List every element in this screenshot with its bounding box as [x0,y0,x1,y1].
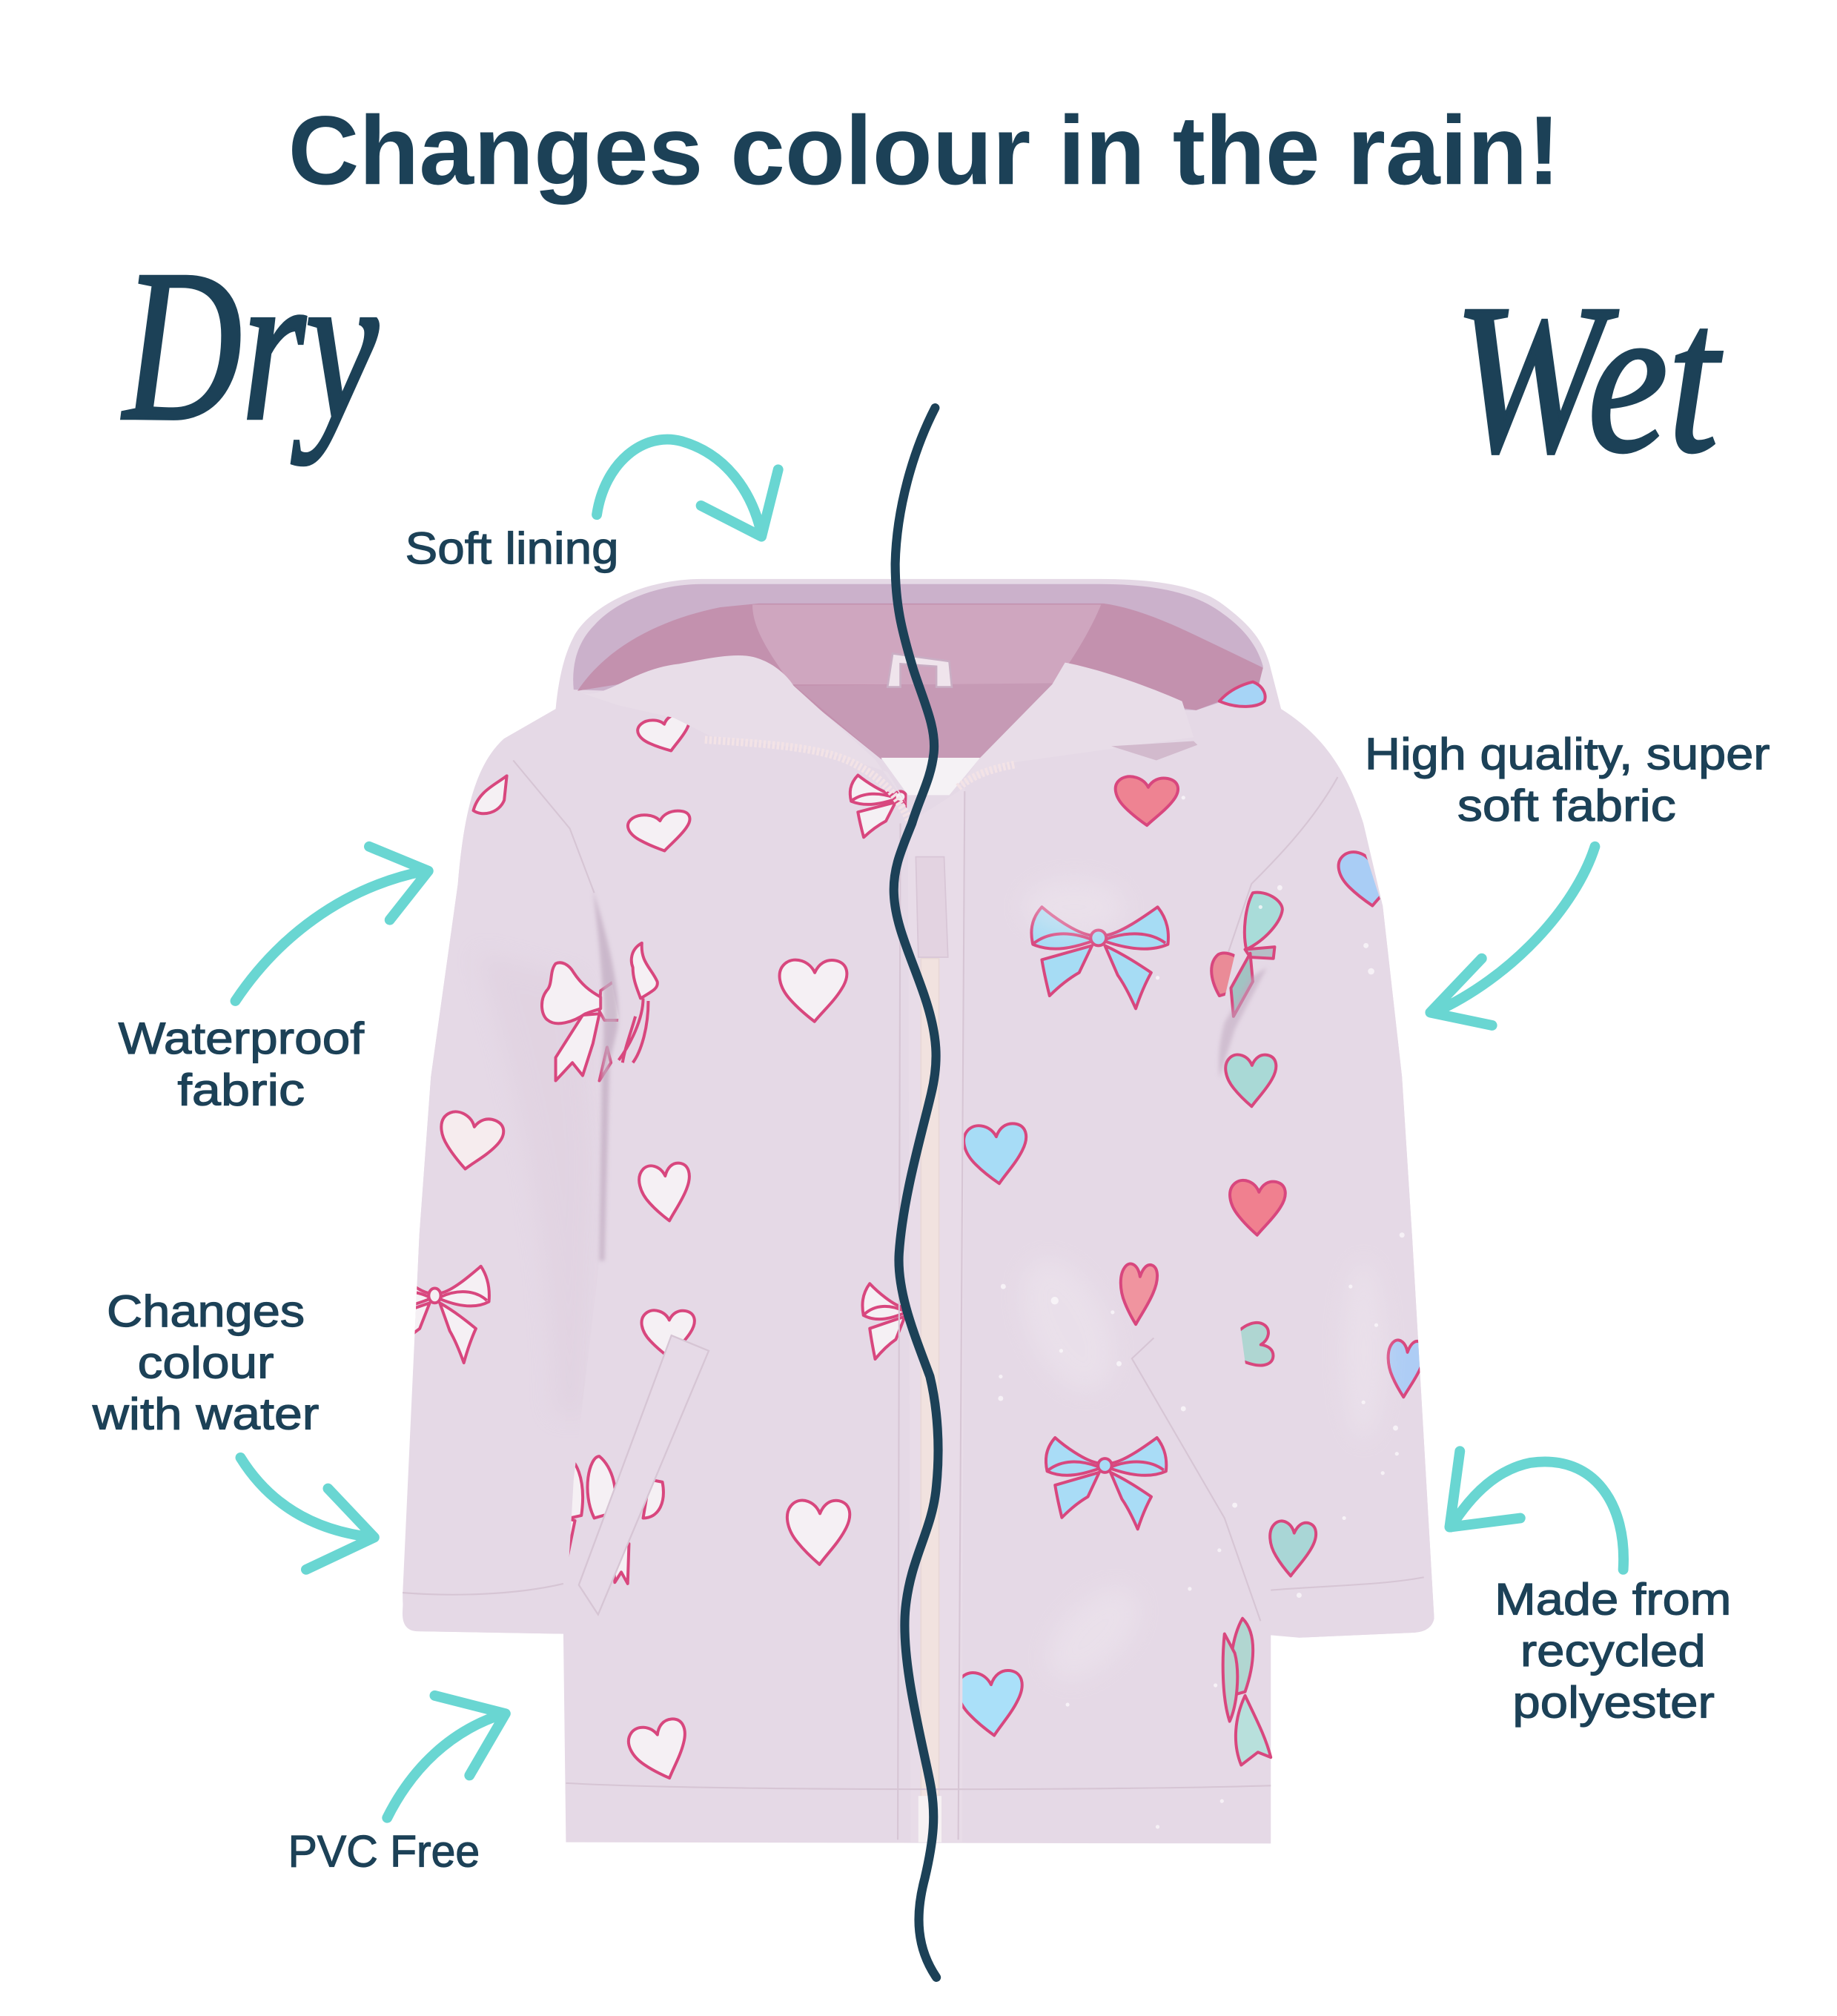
underarm shadow, left [593,890,618,1260]
lining upper lighter panel [752,605,1101,684]
script heading: Dry: Dry [121,225,380,466]
hood pink lining [577,604,1263,759]
pocket bow, right loop [643,1479,663,1518]
label: PVC Free [288,1826,480,1877]
bow at neck [848,773,907,839]
left sleeve [403,739,618,1634]
script heading: Wet: Wet [1454,260,1724,497]
right sleeve [1224,850,1434,1637]
fragment tails [619,998,648,1062]
label: Changes [107,1286,305,1336]
callout: PVC free [288,1696,506,1877]
label line 3: with water [92,1389,319,1439]
shoulder bow fragment [473,776,507,813]
pocket bow, left loop [553,1452,583,1518]
right hood heart [1219,682,1265,707]
zipper teeth on collar [705,740,1016,824]
underarm shadow, right [1219,968,1267,1078]
left pocket flap [579,1335,709,1615]
label line 3: polyester [1512,1676,1715,1727]
sleeve prints [1219,851,1426,1578]
arrow [1430,847,1595,1025]
pocket bow, tails [553,1518,629,1584]
wet patches [1003,879,1384,1696]
lower body bow loop 2 [1223,1634,1237,1722]
pocket bow, middle loop [588,1456,615,1518]
title: Changes colour in the rain! [288,96,1560,205]
bow on sleeve, band [598,981,618,1022]
collar shadow [1111,741,1197,761]
arrow [240,1458,374,1570]
bow on sleeve, tail [1231,954,1253,1017]
label: Soft lining [406,523,619,573]
bow on sleeve, band [1245,947,1274,959]
label line 2: recycled [1520,1625,1706,1676]
body prints, dry side [569,716,907,1779]
arrow [236,847,428,1001]
right collar flap [959,663,1194,787]
label line 2: soft fabric [1457,780,1676,830]
bow on sleeve, tail [556,1014,600,1081]
label line 2: colour [138,1337,274,1387]
zipper bottom stop [918,1796,941,1843]
lower body bow tail [1236,1696,1271,1765]
arrow [1449,1451,1623,1570]
bow on sleeve, second tail [600,1047,611,1081]
body prints, wet side [957,775,1240,1736]
zipper pull [916,857,948,957]
dry / wet dividing line [894,408,939,1977]
hood satin band [573,584,1263,710]
hanging loop [887,653,952,687]
water droplets [998,796,1405,1828]
callout: soft lining [406,440,778,573]
jacket illustration [383,579,1454,1843]
sleeve crease shading [476,952,595,1415]
fragment of bow on body [632,943,658,998]
hood-bottom teal bow print, wet side [1223,1619,1271,1765]
label: High quality, super [1365,729,1770,779]
callout: changes colour with water [92,1286,374,1570]
bow at hip [861,1282,905,1361]
lining lower panel [795,683,1055,759]
callout: high quality fabric [1365,729,1770,1025]
left collar flap [579,655,907,804]
sleeve prints [414,774,618,1364]
seams and hems [403,761,1424,1840]
arrow [387,1696,506,1818]
label: Waterproof [119,1013,364,1063]
callout: recycled polyester [1449,1451,1731,1727]
lower body bow loop 1 [1230,1619,1253,1696]
white neck label [881,758,980,795]
label: Made from [1495,1574,1731,1625]
red heart under arm [1211,953,1240,996]
centre placket [908,787,964,1843]
bow on sleeve, loop [1245,893,1282,950]
bow on sleeve, loop [542,962,600,1023]
zipper teeth [921,959,939,1801]
callout: waterproof fabric [119,847,428,1114]
label line 2: fabric [177,1064,305,1114]
arrow [597,440,778,537]
jacket silhouette [403,579,1434,1843]
